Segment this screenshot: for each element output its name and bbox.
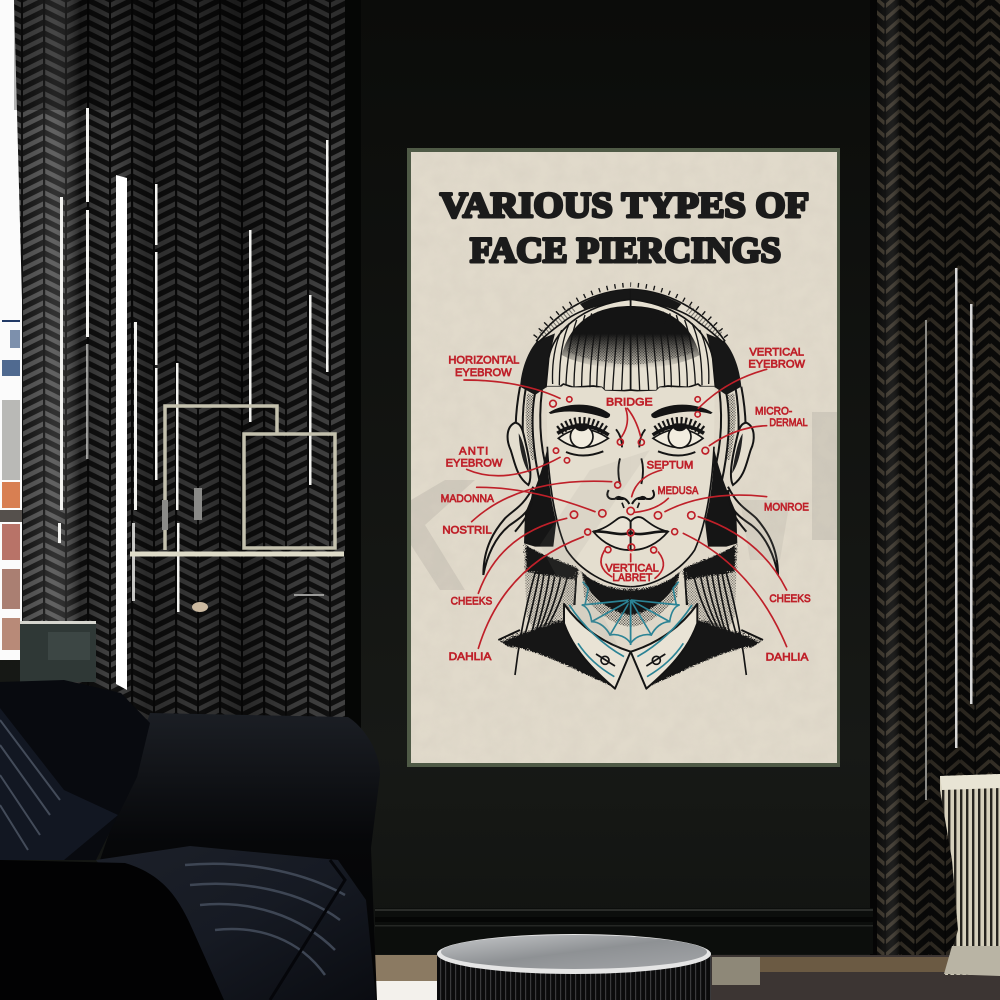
labels: LABRET (612, 572, 652, 584)
labels: SEPTUM (647, 459, 693, 471)
left curtain (14, 0, 345, 720)
piercing points (550, 397, 709, 553)
title: FACE PIERCINGS (470, 230, 781, 270)
labels: EYEBROW (455, 367, 512, 379)
poster (407, 148, 840, 767)
sofa (0, 680, 380, 1000)
poster frame (407, 148, 840, 767)
labels: CHEEKS (769, 593, 811, 605)
piercing guide lines and labels (441, 346, 811, 664)
face illustration (483, 285, 778, 689)
labels: DAHLIA (449, 651, 492, 663)
labels: MADONNA (441, 493, 494, 505)
labels: HORIZONTAL (448, 354, 519, 366)
sofa pillow (0, 680, 150, 860)
vase (940, 774, 1000, 976)
baseboard (375, 908, 873, 954)
labels: ANTI (459, 446, 488, 458)
labels: MICRO- (755, 406, 793, 418)
title: VARIOUS TYPES OF (440, 185, 809, 225)
labels: EYEBROW (748, 358, 805, 370)
side cabinet (20, 621, 96, 682)
labels: NOSTRIL (442, 524, 492, 536)
dark wall column (345, 0, 361, 960)
sofa seat (96, 846, 376, 1000)
guide lines (464, 369, 787, 648)
stool (437, 934, 711, 1000)
labels: CHEEKS (451, 596, 493, 608)
right curtain (870, 0, 1000, 960)
sofa front arm (0, 860, 224, 1000)
labels: DERMAL (769, 417, 808, 429)
watermark shapes (411, 412, 837, 650)
labels: VERTICAL (605, 563, 659, 575)
labels: BRIDGE (606, 396, 653, 408)
labels: MEDUSA (658, 485, 699, 497)
window view (0, 0, 24, 660)
labels: MONROE (764, 501, 809, 513)
labels: DAHLIA (766, 652, 809, 664)
labels: VERTICAL (749, 346, 804, 358)
left curtain light lines (58, 108, 328, 690)
wall frames and shelf (130, 406, 344, 612)
labels: EYEBROW (446, 458, 503, 470)
labels (441, 346, 811, 664)
floor and rug (370, 955, 1000, 1000)
poster paper (411, 152, 837, 763)
title (440, 185, 809, 270)
sofa back cushion (100, 713, 380, 1000)
